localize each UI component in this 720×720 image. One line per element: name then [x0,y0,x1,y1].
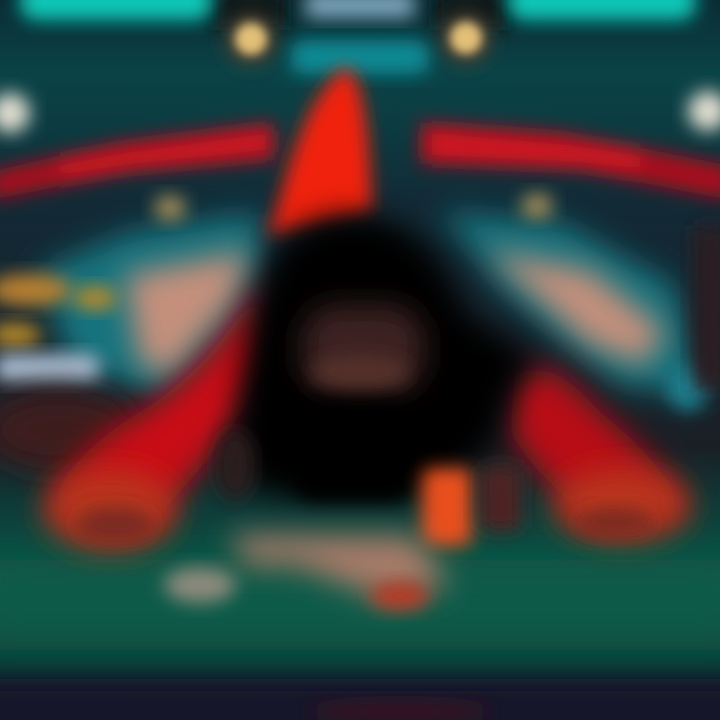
icon: golden ceiling lights [225,12,492,65]
figure: black beard [290,402,415,502]
right colourful casino scene [440,193,720,410]
figure: dark hood and body [215,215,535,501]
figure: face in shadow [302,305,424,393]
poker chip stack: orange cup [422,465,522,546]
left colourful casino scene [0,195,260,470]
right hand: orange fist [554,469,690,541]
figure: red sleeves [50,270,685,525]
playing cards on table [164,535,450,610]
icon: white side lights [0,91,720,133]
ceiling: teal panels and lights [20,0,696,74]
red wall bands [0,122,720,200]
figure: red hood peak [268,66,372,236]
table: green felt [0,560,720,720]
left hand: orange fist [44,470,176,550]
